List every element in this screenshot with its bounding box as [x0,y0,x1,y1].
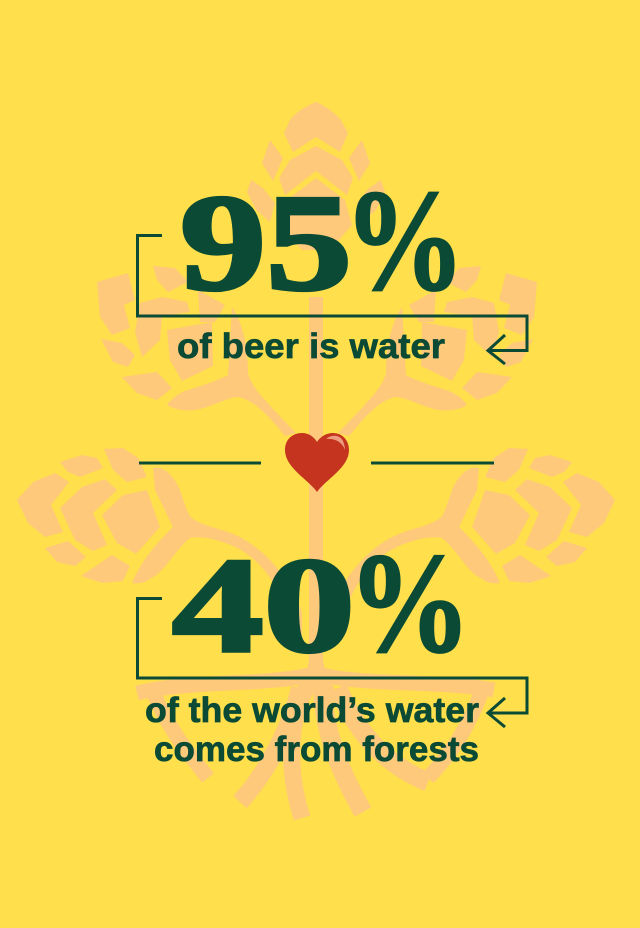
divider with heart [139,433,494,492]
stat: 40% of the world's water comes from forests [138,524,527,769]
divider line left [139,462,261,464]
roots [137,675,494,818]
stat: 95% of beer is water [138,161,527,366]
arrow: bracket from 95% to caption [138,236,527,364]
caption [145,691,479,769]
icon: top hop [247,102,385,250]
hop plant illustration [17,102,615,818]
caption line 1: of the world’s water [145,691,479,730]
percent sign: % [344,161,465,321]
icon: heart [285,433,349,492]
caption: of beer is water [177,327,445,366]
big number 95: 95 [180,166,352,319]
icon: lower right hop [330,448,615,640]
big number 40: 40 [172,531,355,681]
caption line 2: comes from forests [154,730,479,769]
divider line right [371,462,494,464]
icon: upper left hop [97,266,296,436]
arrow: bracket from 40% to caption [138,598,527,727]
trunk [296,297,336,692]
icon: lower left hop [17,448,302,640]
icon: upper right hop [338,266,537,436]
percent sign: % [348,524,471,682]
